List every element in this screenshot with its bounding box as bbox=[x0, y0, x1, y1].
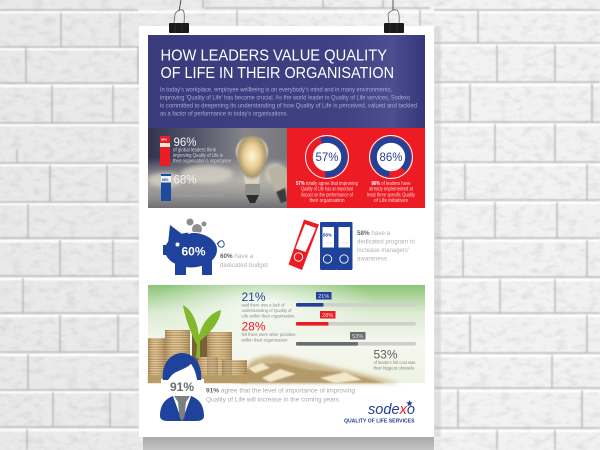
stat: 96%: their organisation's importance bbox=[173, 158, 231, 164]
person suit bbox=[160, 396, 204, 421]
stat: 53% bbox=[374, 348, 416, 370]
caption: 57%: Quality of Life has an important bbox=[301, 187, 353, 193]
text: 58% managers: 58% have a bbox=[357, 230, 391, 237]
icon: piggy bank: 60% bbox=[182, 246, 206, 258]
person hair bbox=[163, 353, 201, 380]
text: 91% agree: 91% agree that the level of importance of improving bbox=[206, 388, 355, 394]
panel: red stats bbox=[287, 128, 425, 208]
intro text: improving 'Quality of Life' has become crucial. As the world leader in Quality of Life services, Sodexo bbox=[160, 94, 411, 102]
stat: 96% bbox=[160, 136, 231, 166]
title bbox=[160, 48, 394, 82]
intro text: as a factor of performance in today's organisations. bbox=[160, 110, 288, 118]
text: 58% managers: awareness bbox=[357, 256, 387, 262]
clip: left binder clip bbox=[169, 0, 189, 33]
title: HOW LEADERS VALUE QUALITY bbox=[160, 48, 387, 64]
stat: 28%: within their organisation bbox=[242, 338, 288, 342]
bar: 53%: 53% bbox=[352, 334, 363, 340]
panel: light bulb photo with stats bbox=[148, 128, 287, 208]
caption: 86%: least three specific Quality bbox=[367, 192, 415, 198]
donut: 57%: 57% bbox=[315, 152, 339, 164]
stat: 96%: improving Quality of Life is bbox=[173, 153, 223, 159]
text: 58% managers: dedicated program to bbox=[357, 238, 415, 246]
caption: 57%: their organisation bbox=[310, 198, 345, 204]
text: 60% budget: 60% have a bbox=[220, 253, 254, 260]
bar: 21%: 21% bbox=[318, 294, 329, 300]
stat: 28%: felt there were other priorities bbox=[242, 332, 296, 337]
icon: person with 91% bbox=[160, 353, 204, 421]
clip: right binder clip bbox=[384, 0, 404, 33]
donut: 86%: 86% bbox=[379, 152, 403, 164]
stat: 96%: 96% bbox=[161, 138, 167, 142]
icon: binders bbox=[288, 220, 352, 270]
photo: coins and plant bbox=[148, 305, 400, 383]
stat: 68%: 68% bbox=[174, 174, 197, 186]
poster sheet bbox=[139, 26, 434, 437]
logo: sodexo: QUALITY OF LIFE SERVICES bbox=[344, 418, 415, 424]
text: 91% agree: Quality of Life will increase in the coming years bbox=[206, 396, 340, 404]
caption: 86% bbox=[367, 181, 415, 204]
icon: person with 91%: 91% bbox=[170, 380, 194, 394]
stat: 68%: of leaders agree it is key bbox=[174, 193, 225, 198]
caption: 86%: 86% of leaders have bbox=[372, 181, 411, 187]
panel: green coin photo with obstacles bbox=[148, 285, 425, 383]
red binder bbox=[288, 220, 319, 270]
stat: 28%: 28% bbox=[242, 320, 266, 334]
stat: 21%: understanding of Quality of bbox=[242, 308, 292, 313]
stat: 28% bbox=[242, 320, 296, 342]
text: 91% agree bbox=[206, 388, 355, 404]
stat: 21% bbox=[242, 290, 295, 318]
logo: sodexo bbox=[344, 400, 415, 424]
photo: light bulbs bbox=[148, 136, 287, 203]
stat: 68%: 68% bbox=[162, 178, 169, 182]
caption: 86%: of Life initiatives bbox=[374, 198, 408, 204]
blue binders: 58% bbox=[323, 232, 332, 238]
stat: 21%: Life within their organisation bbox=[242, 314, 295, 318]
bar: 21% bbox=[296, 292, 416, 307]
bar: 53% bbox=[296, 332, 416, 346]
caption: 86%: already implemented at bbox=[369, 187, 414, 193]
stat: 21%: 21% bbox=[242, 290, 266, 304]
caption: 57%: 57% totally agree that improving bbox=[296, 181, 358, 187]
bar: 28%: 28% bbox=[322, 313, 333, 319]
text: 58% managers: increase managers' bbox=[357, 247, 409, 254]
panel: header bbox=[148, 35, 425, 128]
stat: 96%: of global leaders think bbox=[173, 148, 216, 154]
stat: 96%: 96% bbox=[174, 137, 197, 149]
text: 58% managers bbox=[357, 230, 415, 262]
text: 60% budget: dedicated budget bbox=[220, 262, 268, 269]
text: 60% budget bbox=[220, 253, 268, 269]
caption: 57%: impact on the performance of bbox=[301, 192, 353, 198]
stat: 53%: 53% bbox=[374, 348, 398, 362]
intro text: In today's workplace, employee wellbeing is on everybody's mind and in many environments, bbox=[160, 86, 392, 94]
stat: 53%: of leaders felt cost was bbox=[374, 360, 416, 365]
bar: 28% bbox=[296, 311, 416, 326]
stat: 53%: their biggest obstacle bbox=[374, 366, 415, 370]
icon: piggy bank bbox=[163, 218, 224, 275]
logo: sodexo: sodexo bbox=[368, 402, 415, 418]
caption: 57% bbox=[296, 181, 358, 204]
intro text bbox=[160, 86, 417, 118]
stat: 68% bbox=[161, 174, 225, 201]
intro text: is committed to deepening its understanding of how Quality of Life is perceived, valued and tackled bbox=[160, 102, 417, 110]
stat: 21%: said there was a lack of bbox=[242, 302, 285, 308]
title: OF LIFE IN THEIR ORGANISATION bbox=[160, 65, 394, 82]
